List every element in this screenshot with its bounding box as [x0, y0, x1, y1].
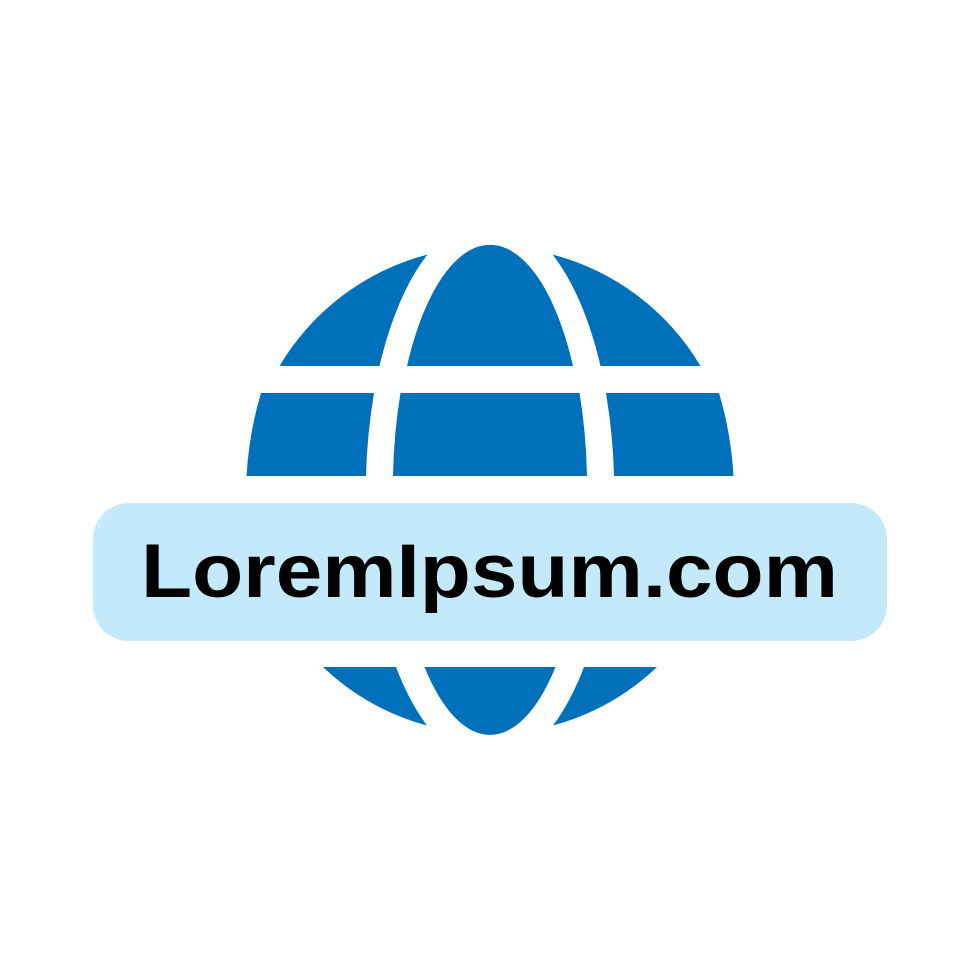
- globe top-left segment: [280, 254, 428, 366]
- globe middle-right segment: [606, 393, 734, 476]
- globe top-right segment: [552, 254, 700, 366]
- globe bottom-left segment: [323, 667, 427, 726]
- globe middle-centre segment: [393, 393, 587, 476]
- globe bottom-centre segment: [424, 667, 556, 735]
- globe bottom-right segment: [553, 667, 657, 726]
- globe middle-left segment: [246, 393, 374, 476]
- address bar: [93, 503, 887, 641]
- icon: globe: [246, 245, 734, 735]
- globe top-centre segment: [407, 245, 573, 366]
- address text: LoremIpsum.com: [141, 529, 838, 614]
